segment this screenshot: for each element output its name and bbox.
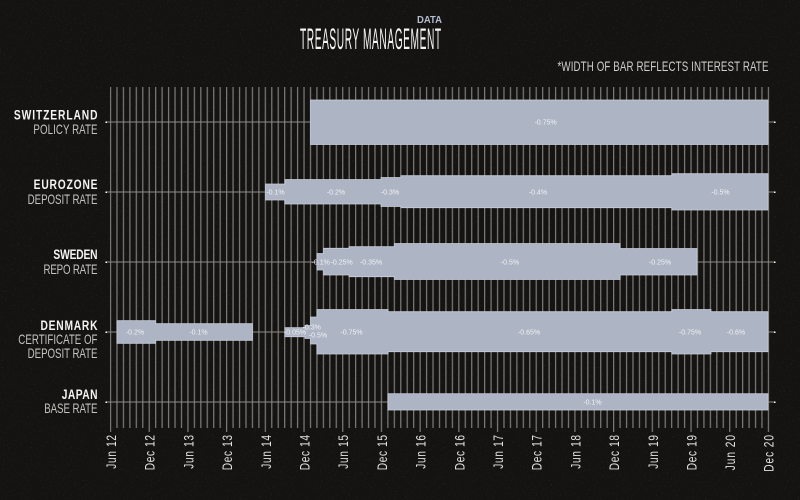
label: Japan base rate bbox=[44, 387, 98, 416]
bar: Eurozone: -0.3% bbox=[381, 190, 399, 196]
label: Eurozone deposit rate: EUROZONE bbox=[34, 177, 98, 192]
label: Denmark certificate of deposit rate: DENMARK bbox=[41, 318, 98, 333]
bar: Sweden: -0.35% bbox=[360, 260, 382, 266]
label: Switzerland policy rate bbox=[14, 107, 98, 137]
bar: Eurozone: -0.5% bbox=[711, 190, 730, 196]
time axis labels: Jun 16 bbox=[413, 435, 429, 469]
time axis labels bbox=[104, 435, 777, 472]
time axis labels: Jun 13 bbox=[181, 435, 197, 469]
time axis labels: Dec 17 bbox=[529, 435, 545, 470]
label: Japan base rate: BASE RATE bbox=[44, 402, 98, 416]
row: Switzerland bbox=[14, 100, 768, 144]
bar: Sweden bbox=[312, 244, 697, 280]
section tag: data: DATA bbox=[417, 14, 442, 26]
label: Denmark certificate of deposit rate: CERTIFICATE OF bbox=[18, 333, 98, 347]
label: Sweden repo rate bbox=[44, 247, 98, 277]
bar: Eurozone: -0.4% bbox=[529, 190, 547, 196]
time axis labels: Jun 20 bbox=[723, 435, 739, 470]
time axis labels: Jun 14 bbox=[258, 435, 274, 469]
time axis labels: Dec 13 bbox=[220, 435, 235, 470]
label: Sweden repo rate: REPO RATE bbox=[44, 263, 98, 277]
row: Japan bbox=[44, 387, 768, 416]
label: Eurozone deposit rate: DEPOSIT RATE bbox=[28, 193, 98, 207]
title: TREASURY MANAGEMENT bbox=[300, 22, 441, 56]
label: Denmark certificate of deposit rate: DEPOSIT RATE bbox=[28, 347, 98, 361]
time axis labels: Jun 15 bbox=[336, 435, 352, 469]
time axis labels: Dec 19 bbox=[684, 435, 700, 470]
bar: Eurozone bbox=[266, 174, 768, 210]
label: Switzerland policy rate: POLICY RATE bbox=[33, 123, 98, 137]
bar: Denmark: -0.1% bbox=[189, 330, 208, 336]
bar: Denmark: -0.05% bbox=[284, 330, 306, 336]
bar: Denmark: -0.6% bbox=[727, 330, 745, 336]
time axis labels: Jun 12 bbox=[104, 435, 119, 469]
bar: Denmark: -0.2% bbox=[126, 330, 144, 336]
bar: Sweden: -0.1% bbox=[312, 260, 330, 266]
time axis labels: Dec 12 bbox=[142, 435, 158, 470]
label: Eurozone deposit rate bbox=[28, 177, 98, 207]
row: Eurozone bbox=[28, 174, 768, 210]
bar: Denmark: -0.65% bbox=[518, 330, 540, 336]
time axis labels: Dec 15 bbox=[374, 435, 390, 470]
bar: Japan bbox=[388, 394, 768, 410]
bar: Denmark: -0.75% bbox=[340, 330, 363, 336]
monthly grid lines bbox=[110, 87, 769, 432]
row: Denmark bbox=[18, 310, 768, 361]
time axis labels: Jun 17 bbox=[491, 435, 506, 469]
time axis labels: Dec 16 bbox=[452, 435, 468, 470]
label: Switzerland policy rate: SWITZERLAND bbox=[14, 107, 98, 123]
bar: Sweden: -0.25% bbox=[331, 260, 353, 266]
time axis labels: Jun 18 bbox=[568, 435, 584, 469]
time axis labels: Dec 14 bbox=[297, 435, 313, 470]
bar: Eurozone: -0.1% bbox=[266, 190, 285, 196]
label: Japan base rate: JAPAN bbox=[62, 387, 98, 402]
time axis labels: Jun 19 bbox=[645, 435, 661, 469]
label: Sweden repo rate: SWEDEN bbox=[53, 247, 98, 262]
time axis labels: Dec 20 bbox=[761, 435, 777, 472]
bar: Denmark: -0.75% bbox=[679, 330, 701, 336]
bar: Denmark: -0.5% bbox=[309, 332, 327, 340]
row centre lines bbox=[106, 122, 776, 403]
bar: Denmark bbox=[117, 310, 768, 354]
bar: Eurozone: -0.2% bbox=[327, 190, 345, 196]
bar: Sweden: -0.25% bbox=[649, 260, 671, 266]
note: bar width: *WIDTH OF BAR REFLECTS INTEREST RATE bbox=[558, 60, 769, 74]
label: Denmark certificate of deposit rate bbox=[18, 318, 98, 361]
time axis labels: Dec 18 bbox=[607, 435, 622, 470]
row: Sweden bbox=[44, 244, 697, 280]
bar: Switzerland: -0.75% bbox=[535, 120, 557, 126]
bar: Sweden: -0.5% bbox=[501, 260, 519, 266]
bar: Japan: -0.1% bbox=[583, 400, 602, 406]
bar: Switzerland bbox=[310, 100, 768, 144]
bar: Denmark: -0.3% bbox=[303, 324, 321, 332]
